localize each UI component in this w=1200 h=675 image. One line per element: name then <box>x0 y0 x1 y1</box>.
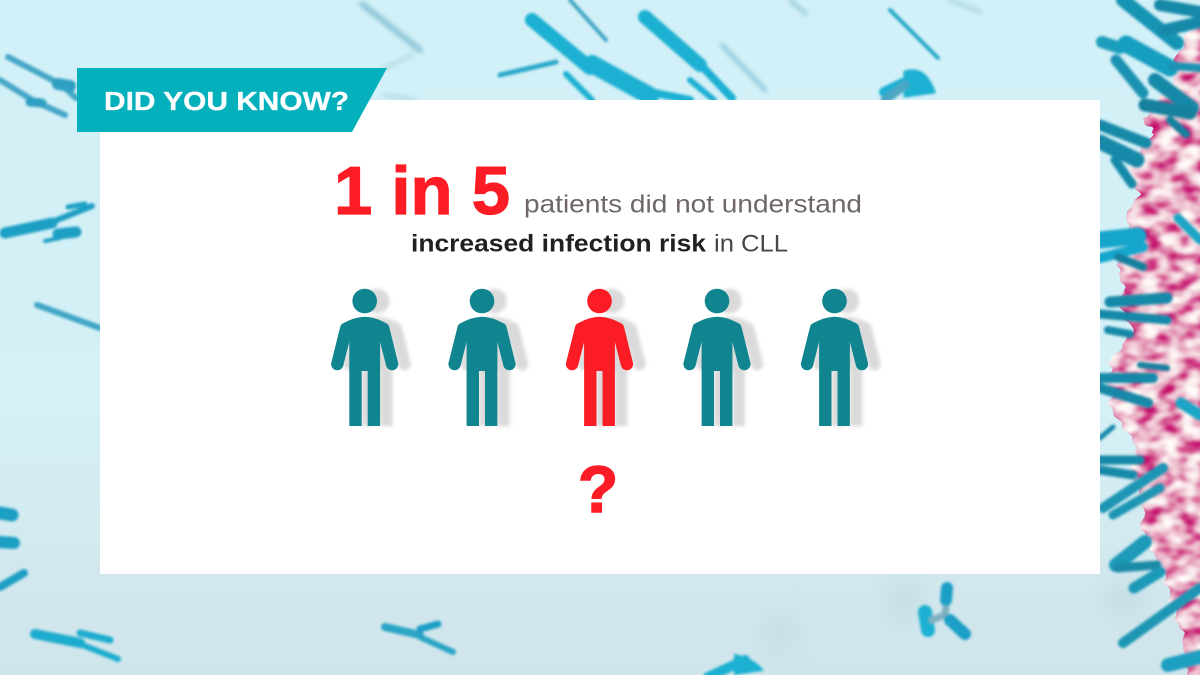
background haze <box>764 576 1147 654</box>
faint out-of-focus antibodies <box>362 0 980 100</box>
headline: 1 in 5 patients: patients did not understand <box>524 190 862 218</box>
person 3 highlighted <box>566 289 646 426</box>
person 5 <box>801 289 881 426</box>
person 1 <box>331 289 411 426</box>
person 2 <box>448 289 528 426</box>
banner: did you know: DID YOU KNOW? <box>104 86 349 116</box>
headline: 1 in 5 patients <box>334 153 862 229</box>
question mark: ? <box>578 452 618 526</box>
banner: did you know <box>77 68 387 132</box>
antibodies: left and top <box>0 0 938 328</box>
row of five people <box>331 289 881 426</box>
virus body <box>1108 15 1200 675</box>
antibodies: virus spikes <box>1100 0 1200 665</box>
subheading: infection risk: in CLL <box>714 230 788 258</box>
person 4 <box>683 289 763 426</box>
white panel <box>100 100 1100 574</box>
headline: 1 in 5 patients: 1 in 5 <box>334 153 510 229</box>
antibodies: bottom <box>0 513 965 675</box>
subheading: infection risk: increased infection risk <box>411 230 707 258</box>
